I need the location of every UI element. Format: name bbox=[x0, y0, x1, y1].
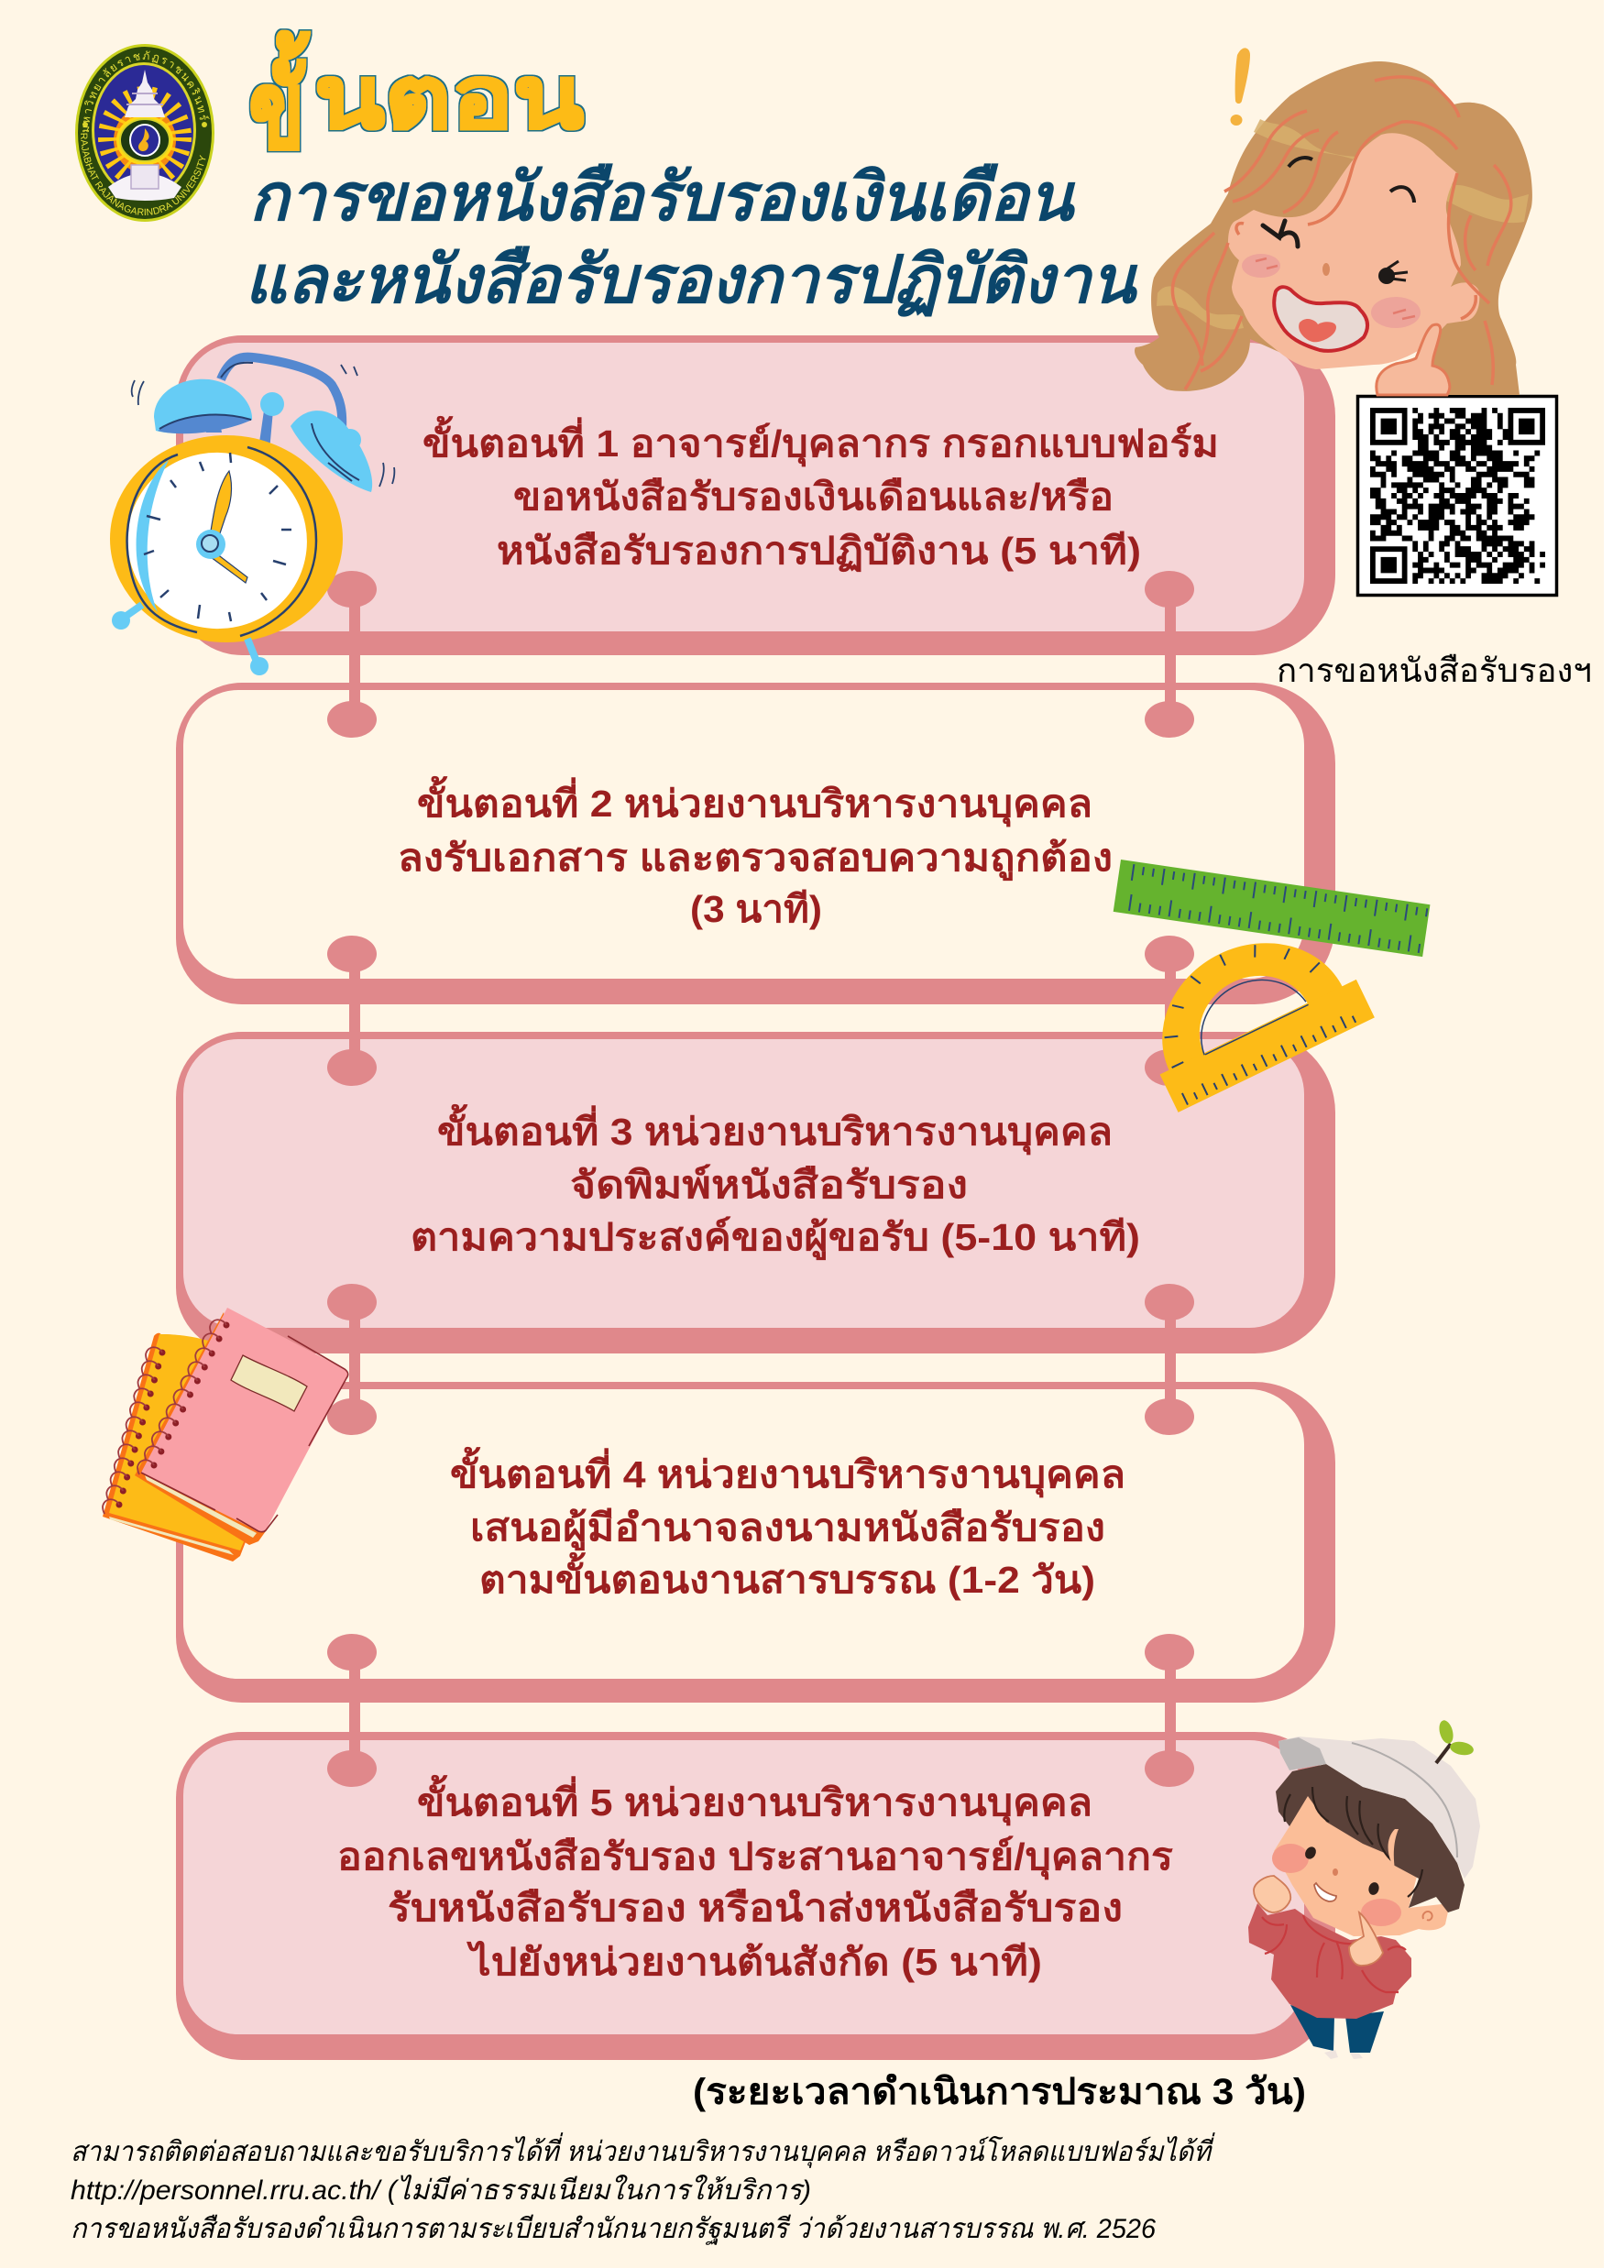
text: step 5: ออกเลขหนังสือรับรอง ประสานอาจารย์/บุคลากร bbox=[337, 1835, 1173, 1880]
icon: university logo: RAJABHAT RAJANAGARINDRA UNIVERSITY bbox=[81, 134, 205, 215]
text: step 2: ลงรับเอกสาร และตรวจสอบความถูกต้อง bbox=[398, 837, 1113, 882]
connector: step 4 to 5 bbox=[327, 1634, 1194, 1787]
icon: university logo: มหาวิทยาลัยราชภัฏราชนครินทร์ bbox=[82, 51, 210, 132]
title: steps bbox=[249, 31, 584, 171]
caption: QR label: การขอหนังสือรับรองฯ bbox=[1277, 652, 1592, 689]
text: step 4: ขั้นตอนที่ 4 หน่วยงานบริหารงานบุคคล bbox=[450, 1447, 1125, 1498]
text: step 5: รับหนังสือรับรอง หรือนำส่งหนังสือรับรอง bbox=[388, 1887, 1123, 1929]
heading line 1: การขอหนังสือรับรองเงินเดือน bbox=[249, 161, 1076, 235]
connector: step 1 to 2 bbox=[327, 571, 1194, 738]
connector: step 3 to 4 bbox=[327, 1284, 1194, 1435]
text: step 1: หนังสือรับรองการปฏิบัติงาน (5 นาที) bbox=[497, 530, 1141, 572]
text: step 2 bbox=[398, 776, 1113, 930]
text: footer notes bbox=[71, 2132, 1215, 2245]
text: step 4 bbox=[450, 1447, 1125, 1601]
text: step 3 bbox=[411, 1104, 1140, 1261]
text: step 3: ขั้นตอนที่ 3 หน่วยงานบริหารงานบุคคล bbox=[437, 1104, 1113, 1156]
icon: yellow protractor bbox=[1124, 905, 1375, 1112]
icon: university logo bbox=[75, 44, 214, 222]
title: steps: ขั้ bbox=[249, 31, 310, 171]
connector: step 2 to 3 bbox=[327, 936, 1194, 1086]
text: step 2: (3 นาที) bbox=[690, 888, 822, 930]
text: step 3: จัดพิมพ์หนังสือรับรอง bbox=[570, 1164, 968, 1206]
text: total time: (ระยะเวลาดำเนินการประมาณ 3 วัน) bbox=[693, 2072, 1306, 2112]
text: step 1: ขั้นตอนที่ 1 อาจารย์/บุคลากร กรอกแบบฟอร์ม bbox=[422, 416, 1219, 467]
text: step 1 bbox=[422, 416, 1219, 572]
heading line 2: และหนังสือรับรองการปฏิบัติงาน bbox=[245, 244, 1138, 317]
text: footer notes: สามารถติดต่อสอบถามและขอรับบริการได้ที่ หน่วยงานบริหารงานบุคคล หรือดาวน์โหลดแบบฟอร์มได้ที่ bbox=[71, 2132, 1215, 2168]
text: footer notes: การขอหนังสือรับรองดำเนินการตามระเบียบสำนักนายกรัฐมนตรี ว่าด้วยงานสารบรรณ พ.ศ. 2526 bbox=[71, 2214, 1156, 2245]
icon: QR code bbox=[1358, 396, 1556, 596]
panel: step 5 box bbox=[176, 1732, 1335, 2060]
icon: notebooks bbox=[103, 1308, 348, 1561]
icon: girl character bbox=[1135, 48, 1532, 395]
text: step 5 bbox=[337, 1775, 1173, 1983]
icon: boy character bbox=[1248, 1719, 1480, 2059]
text: step 1: ขอหนังสือรับรองเงินเดือนและ/หรือ bbox=[513, 476, 1114, 518]
panel: step 4 box bbox=[176, 1382, 1335, 1703]
title: steps: นตอน bbox=[314, 49, 584, 146]
text: footer notes: http://personnel.rru.ac.th/ (ไม่มีค่าธรรมเนียมในการให้บริการ) bbox=[71, 2175, 811, 2206]
text: step 5: ไปยังหน่วยงานต้นสังกัด (5 นาที) bbox=[466, 1940, 1042, 1983]
icon: alarm clock bbox=[110, 357, 394, 675]
text: step 5: ขั้นตอนที่ 5 หน่วยงานบริหารงานบุคคล bbox=[417, 1775, 1092, 1826]
text: step 4: เสนอผู้มีอำนาจลงนามหนังสือรับรอง bbox=[470, 1507, 1105, 1551]
panel: step 1 box bbox=[176, 335, 1335, 655]
text: step 4: ตามขั้นตอนงานสารบรรณ (1-2 วัน) bbox=[479, 1552, 1095, 1601]
panel: step 2 box bbox=[176, 683, 1335, 1004]
icon: green ruler bbox=[1114, 860, 1430, 957]
panel: step 3 box bbox=[176, 1032, 1335, 1353]
text: step 3: ตามความประสงค์ของผู้ขอรับ (5-10 นาที) bbox=[411, 1216, 1140, 1261]
text: step 2: ขั้นตอนที่ 2 หน่วยงานบริหารงานบุคคล bbox=[417, 776, 1092, 827]
